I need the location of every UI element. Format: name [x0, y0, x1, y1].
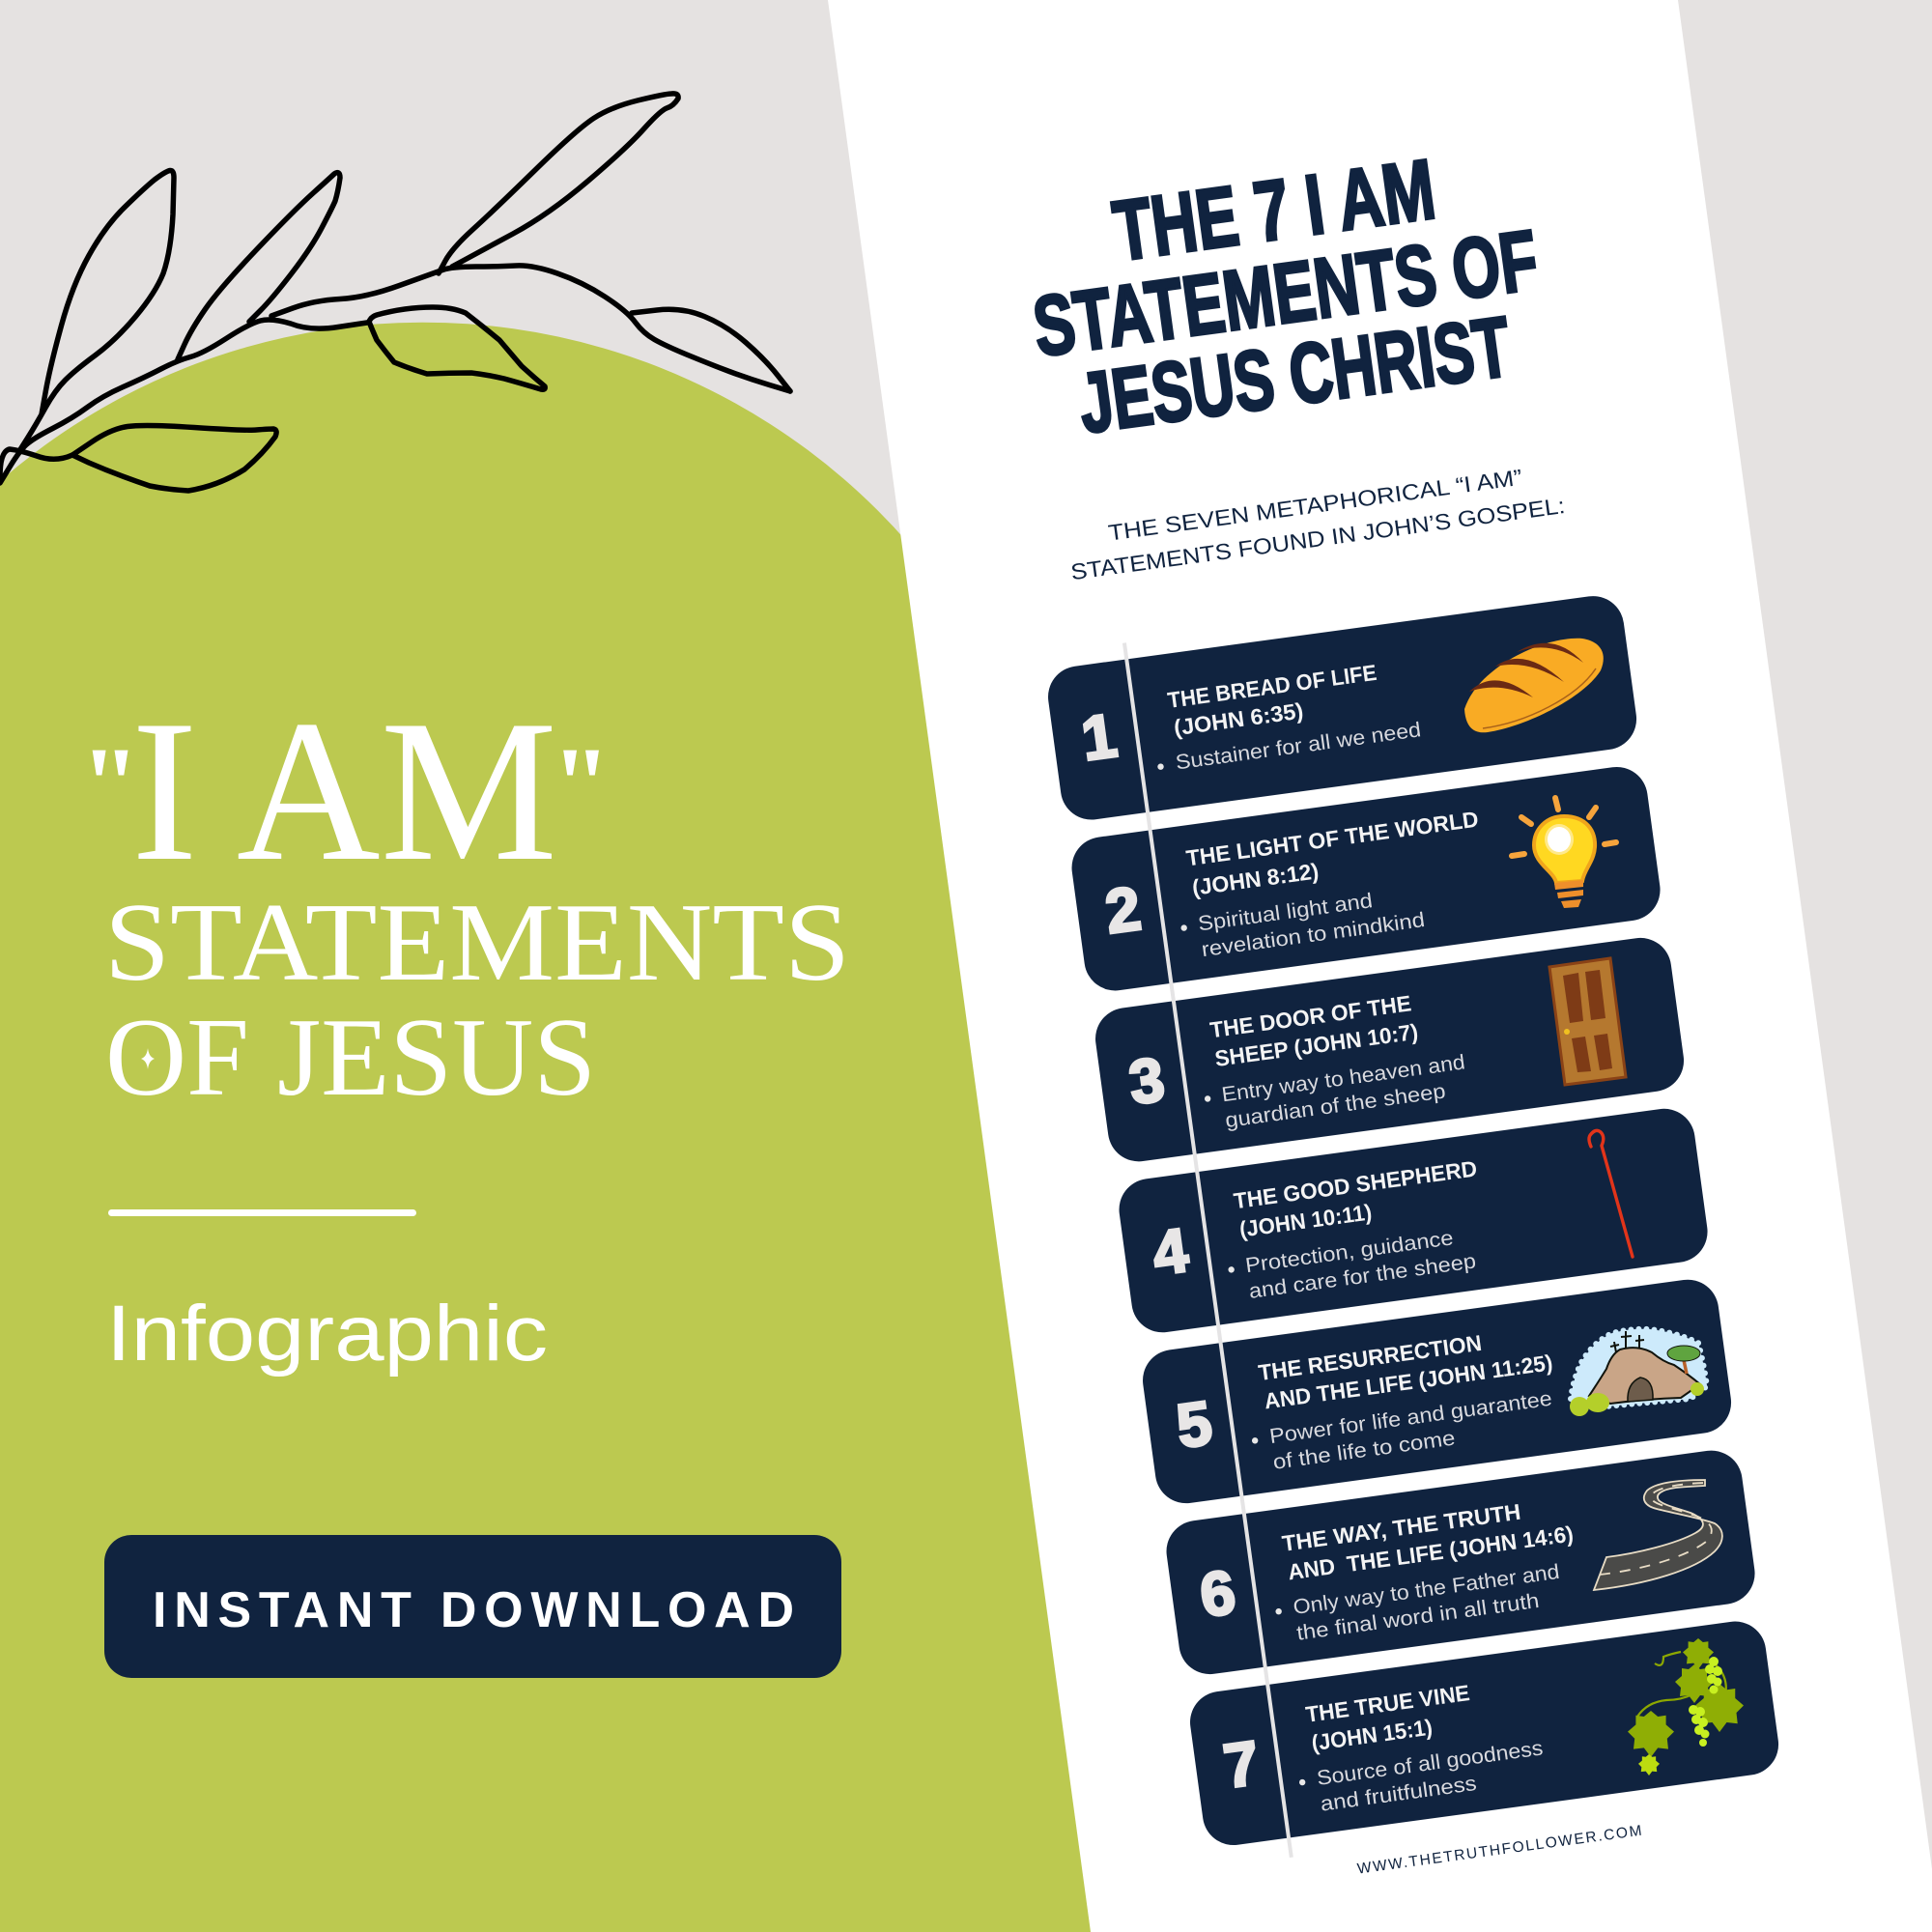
icon: bread loaf: [1464, 639, 1604, 732]
icon: shepherd staff: [1589, 1130, 1633, 1257]
card 2: revelation to mindkind: [1200, 908, 1426, 961]
panel: infographic sheet: [828, 0, 1932, 1932]
card 6: the final word in all truth: [1295, 1589, 1541, 1645]
card 5: of the life to come: [1271, 1426, 1457, 1474]
card 7: 7: [1220, 1727, 1264, 1802]
card 6: 6: [1196, 1556, 1239, 1631]
card 1: THE BREAD OF LIFE: [1166, 660, 1378, 713]
card 6: THE WAY, THE TRUTH: [1281, 1499, 1522, 1556]
card 3: Entry way to heaven and: [1220, 1050, 1466, 1106]
card 6: Only way to the Father and: [1292, 1560, 1561, 1619]
icon: empty tomb: [1570, 1329, 1707, 1416]
title: I AM: ": [552, 725, 611, 843]
card 4: and care for the sheep: [1247, 1249, 1477, 1303]
card 1: (JOHN 6:35): [1172, 697, 1305, 740]
subtitle: infographic: Infographic: [106, 1290, 548, 1378]
card 2: (JOHN 8:12): [1190, 858, 1321, 900]
footer website: WWW.THETRUTHFOLLOWER.COM: [1356, 1823, 1643, 1878]
card 5: Power for life and guarantee: [1268, 1387, 1553, 1448]
sheet title: STATEMENTS OF: [1028, 212, 1543, 375]
card 7: (JOHN 15:1): [1310, 1715, 1434, 1755]
card 7: and fruitfulness: [1319, 1772, 1478, 1816]
card 4: Protection, guidance: [1244, 1226, 1455, 1277]
icon: winding road: [1594, 1480, 1722, 1590]
icon: sparkle in O: [141, 1048, 155, 1069]
card 5: 5: [1173, 1388, 1216, 1462]
sheet subtitle: STATEMENTS FOUND IN JOHN’S GOSPEL:: [1069, 493, 1567, 584]
card 2: Spiritual light and: [1197, 889, 1374, 935]
card 1: 1: [1077, 700, 1121, 774]
sheet subtitle: [1065, 459, 1567, 584]
icon: door: [1549, 958, 1626, 1085]
card 5: [1139, 1276, 1735, 1507]
card 4: 4: [1149, 1215, 1192, 1289]
card 6: [1162, 1447, 1759, 1678]
title: of jesus: OF JESUS: [105, 996, 596, 1119]
title: statements: STATEMENTS: [104, 881, 850, 1004]
card 1: [1044, 592, 1640, 824]
card 7: THE TRUE VINE: [1304, 1680, 1471, 1727]
icon: grape vine: [1628, 1638, 1744, 1776]
card 7: [1186, 1618, 1782, 1849]
card 5: THE RESURRECTION: [1257, 1330, 1483, 1385]
card 4: (JOHN 10:11): [1237, 1199, 1374, 1242]
sheet title: [1016, 128, 1554, 456]
card 3: guardian of the sheep: [1224, 1079, 1447, 1132]
title: I AM: ": [81, 725, 140, 843]
rotated sheet content: [980, 123, 1789, 1897]
title: I AM: I AM: [131, 679, 557, 903]
card 3: THE DOOR OF THE: [1208, 990, 1412, 1042]
line art branch with leaves: [0, 94, 790, 491]
sheet subtitle: THE SEVEN METAPHORICAL “I AM”: [1107, 465, 1523, 546]
divider: [108, 1209, 416, 1216]
sheet title: THE 7 I AM: [1108, 141, 1440, 279]
vertical timeline line: [1124, 642, 1292, 1858]
green arch shape: [0, 323, 1256, 1932]
card 4: [1115, 1105, 1712, 1336]
icon: light bulb: [1512, 798, 1616, 908]
button: instant download: [104, 1535, 841, 1678]
button: instant download: INSTANT DOWNLOAD: [153, 1582, 794, 1638]
card 3: 3: [1125, 1044, 1169, 1118]
card 6: AND THE LIFE (JOHN 14:6): [1287, 1521, 1575, 1584]
card 2: THE LIGHT OF THE WORLD: [1184, 807, 1480, 870]
card 7: Source of all goodness: [1316, 1736, 1545, 1790]
card 5: AND THE LIFE (JOHN 11:25): [1263, 1350, 1554, 1413]
card 3: [1092, 934, 1688, 1165]
card 3: SHEEP (JOHN 10:7): [1213, 1019, 1419, 1071]
card 2: 2: [1101, 873, 1145, 947]
card 4: THE GOOD SHEPHERD: [1232, 1155, 1479, 1213]
card 2: [1067, 763, 1664, 994]
sheet title: JESUS CHRIST: [1073, 298, 1516, 451]
card 1: Sustainer for all we need: [1174, 718, 1422, 774]
